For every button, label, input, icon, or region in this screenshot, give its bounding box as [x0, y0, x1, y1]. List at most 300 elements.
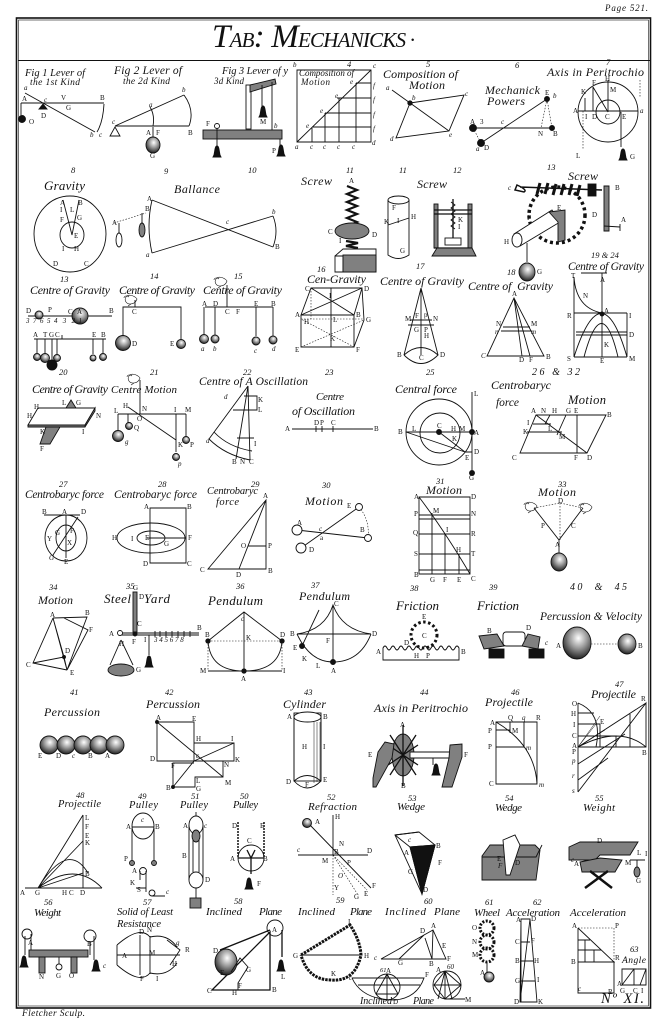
figure 54: wedge in block: 54 — [505, 793, 514, 803]
figure 46: projectile: A — [490, 719, 495, 727]
figure 49: pulley: P — [124, 855, 128, 863]
figure 51: pulley block: A — [183, 822, 188, 830]
figure 9: ballance: 10 — [248, 165, 257, 175]
figure 44: axis in peritrochio machine — [368, 687, 468, 790]
figure 5: composition of motion: Composition of — [383, 67, 460, 81]
figure 15: centre of gravity bar: c — [254, 347, 258, 355]
figure 7: axis in peritrochio: a — [640, 107, 644, 115]
figure 58: inclined plane — [205, 896, 285, 997]
figure 59: inclined plane chain: H — [364, 952, 369, 960]
figure 25: central force: C — [437, 422, 442, 430]
figure 56: weight table with pulleys: B — [87, 940, 92, 948]
figure 20: suspended weights: C — [55, 331, 60, 339]
figure 49: pulley: S — [137, 886, 141, 894]
figure 15: centre of gravity bar: F — [236, 308, 240, 316]
figure 6: mechanick powers — [470, 60, 558, 153]
figure 44: axis in peritrochio machine: F — [464, 751, 468, 759]
figure 22: centre of oscillation sector: C — [249, 458, 254, 466]
figure 37: pendulum cycloid: E — [293, 644, 297, 652]
figure 20b: plank on prism — [27, 382, 109, 453]
title: TAB: MECHANICKS · — [212, 19, 415, 55]
figure 13: centre of gravity line: 13 — [60, 274, 68, 284]
figure 17: centre of gravity cone: G — [414, 326, 419, 334]
figure 43: cylinder: E — [323, 776, 327, 784]
figure 7: axis in peritrochio: K — [581, 88, 586, 96]
figure 21: centre of motion: L — [114, 407, 118, 415]
figure 37: pendulum cycloid: A — [331, 667, 336, 675]
figure 8: gravity: C — [84, 260, 89, 268]
figure 62: acceleration — [505, 897, 560, 1006]
figure 2: lever of the second kind — [110, 65, 193, 160]
figure 38: friction gear and rack — [376, 583, 466, 660]
figure 35: steel yard — [104, 581, 202, 676]
figure 57: solid of least resistance: N — [147, 926, 152, 934]
figure 43: cylinder: I — [323, 743, 326, 751]
figure 11 second: cylinder thread: H — [411, 213, 416, 221]
figure 63: acceleration squares: A — [572, 922, 577, 930]
figure 53: wedge: D — [423, 886, 428, 894]
plate number: Nº XI. — [600, 991, 644, 1007]
figure 58: inclined plane: B — [272, 986, 277, 994]
figure 34: motion parallelograms: A — [50, 611, 55, 619]
figure 14: centre of gravity frame: Centre of Gravity — [119, 283, 196, 297]
figure 20b: plank on prism: I — [82, 428, 85, 436]
figure 12: screw press: 12 — [453, 165, 462, 175]
figure 62: acceleration: B — [515, 957, 520, 965]
figure 42: percussion squares: K — [235, 756, 240, 764]
figure 20b: plank on prism: F — [40, 445, 44, 453]
figure 28: centrobaryc force rectangle: H — [112, 534, 117, 542]
figure 58: inclined plane: C — [207, 987, 212, 995]
figure 1: lever of the first kind: c — [99, 131, 103, 139]
figure 15: centre of gravity bar: B — [271, 300, 276, 308]
figures 26 and 32: centrobaryc force motion: E — [574, 407, 578, 415]
figure 11: screw with block: I — [339, 237, 342, 245]
figure 35: steel yard: F — [132, 638, 136, 646]
figure 55: weight table: D — [597, 837, 602, 845]
figure 60: inclined plane triangle: Inclined — [384, 906, 426, 918]
figure 20: suspended weights: T — [43, 331, 48, 339]
figure 33: motion with hands: D — [558, 497, 563, 505]
figure 35: steel yard: I — [144, 636, 147, 644]
figure 28: centrobaryc force rectangle: Centrobaryc force — [114, 489, 197, 501]
figure 52: refraction: c — [297, 846, 301, 854]
figure 33: motion with hands: P — [541, 522, 545, 530]
figure 7: axis in peritrochio: G — [630, 153, 635, 161]
figures 26 and 32: centrobaryc force motion: K — [523, 428, 528, 436]
figure 39: friction rollers — [476, 582, 549, 658]
figure 18: centre of gravity triangle: Centre of Gravity — [468, 279, 554, 293]
figure 27: centrobaryc force ellipses: F — [70, 527, 74, 535]
figure 56: weight table with pulleys: G — [56, 972, 61, 980]
figure 7: axis in peritrochio: M — [610, 86, 617, 94]
figure 31: motion chart: C — [471, 575, 476, 583]
figure 27: centrobaryc force ellipses — [25, 479, 104, 566]
figure 13: endless screw and gear: G — [537, 268, 542, 276]
figures 61 and 60: inclined plane circles: Inclined — [359, 996, 393, 1007]
figures 40 and 45: percussion and velocity: A — [556, 642, 561, 650]
figure 3: lever of the third kind: 3d Kind — [213, 76, 244, 86]
figure 52: refraction: 52 — [327, 792, 336, 802]
figure 16: centre of gravity cube: F — [356, 346, 360, 354]
figure 4: composition of motion grid: a — [295, 143, 299, 151]
figure 4: composition of motion grid: 4 — [347, 59, 352, 69]
figure 25: central force: D — [474, 448, 479, 456]
figure 49: pulley: K — [130, 879, 135, 887]
figure 46: projectile: Projectile — [484, 695, 534, 709]
figure 46: projectile: m — [539, 781, 544, 789]
figure 55: weight table: Weight — [583, 802, 616, 814]
figure 17: centre of gravity cone: F — [415, 312, 419, 320]
figure 35: steel yard: G — [133, 584, 138, 592]
figure 48: projectile parabolas: Projectile — [57, 799, 101, 810]
figures 26 and 32: centrobaryc force motion: 26 & 32 — [532, 367, 580, 378]
figure 16: centre of gravity cube: I — [329, 292, 332, 300]
figure 63b: angle: C — [633, 987, 638, 995]
figure 11 second: cylinder thread: F — [392, 204, 396, 212]
figure 16: centre of gravity cube: B — [356, 311, 361, 319]
figure 53: wedge: F — [438, 859, 442, 867]
figure 9: ballance — [112, 165, 280, 259]
figure 38: friction gear and rack: Friction — [395, 598, 439, 613]
figure 58: inclined plane: Plane — [258, 906, 282, 918]
figure 6: mechanick powers: a — [476, 145, 480, 153]
figure 54: wedge in block: Wedge — [495, 802, 522, 814]
figures 26 and 32: centrobaryc force motion: I — [527, 419, 530, 427]
figure 1: lever of the first kind: A — [22, 95, 27, 103]
figure 62: acceleration: K — [538, 998, 543, 1006]
figure 18: centre of gravity triangle: A — [512, 290, 517, 298]
figures 19 and 24: centre of gravity parabola — [567, 250, 645, 365]
figure 36: pendulum: c — [241, 615, 245, 623]
figure 4: composition of motion grid: c — [323, 143, 327, 151]
figures 61 and 60: inclined plane circles — [349, 963, 472, 1007]
figure 49: pulley: A — [126, 823, 131, 831]
figure 17: centre of gravity cone: 17 — [416, 261, 425, 271]
figure 52: refraction: B — [334, 848, 339, 856]
figure 16: centre of gravity cube: G — [366, 316, 371, 324]
figure 54: wedge in block: D — [515, 859, 520, 867]
figure 57: solid of least resistance: F — [140, 975, 144, 983]
figure 30: motion of balls: c — [319, 525, 323, 533]
figure 22: centre of oscillation sector: B — [232, 458, 237, 466]
figure 27: centrobaryc force ellipses: G — [49, 554, 54, 562]
figure 57: solid of least resistance — [116, 897, 190, 983]
figure 38: friction gear and rack: A — [376, 648, 381, 656]
figure 31: motion chart: T — [471, 550, 476, 558]
figure 37: pendulum cycloid: L — [316, 662, 320, 670]
figure 25: central force: 25 — [426, 367, 434, 377]
figure 28: centrobaryc force rectangle: D — [143, 560, 148, 568]
figure 8: gravity: D — [53, 260, 58, 268]
figure 60: inclined plane triangle: G — [398, 959, 403, 967]
figure 23: centre of oscillation line: 23 — [325, 367, 334, 377]
figure 17: centre of gravity cone: H — [424, 332, 429, 340]
figure 29: centrobaryc force triangle: Centrobaryc — [207, 486, 258, 497]
figures 26 and 32: centrobaryc force motion: L — [548, 425, 552, 433]
figure 30: motion of balls: E — [347, 502, 351, 510]
figure 4: composition of motion grid: c — [373, 62, 377, 70]
figure 62: acceleration: D — [531, 915, 536, 923]
figure 55: weight table: G — [636, 877, 641, 885]
figures 19 and 24: centre of gravity parabola: N — [583, 292, 588, 300]
figure 28: centrobaryc force rectangle: C — [187, 560, 192, 568]
figure 41: percussion balls: Percussion — [43, 705, 100, 719]
figure 48: projectile parabolas: D — [80, 889, 85, 897]
figure 51: pulley block: D — [205, 876, 210, 884]
figure 37: pendulum cycloid: B — [290, 630, 295, 638]
figure 56: weight table with pulleys: A — [28, 939, 33, 947]
figure 7: axis in peritrochio: L — [576, 152, 580, 160]
figure 15: centre of gravity bar: 15 — [234, 271, 242, 281]
figure 13: endless screw and gear: D — [592, 211, 597, 219]
figure 43: cylinder: D — [286, 778, 291, 786]
figure 61: wheel gears: 61 — [485, 897, 494, 907]
figure 52: refraction: A — [315, 818, 320, 826]
figure 30: motion of balls: A — [297, 519, 302, 527]
figure 22: centre of oscillation sector: 22 — [243, 367, 252, 377]
figure 29: centrobaryc force triangle: 29 — [251, 479, 260, 489]
figure 1: lever of the first kind: O — [29, 118, 34, 126]
figure 21: centre of motion: 21 — [150, 367, 158, 377]
figure 9: ballance: a — [146, 251, 150, 259]
figure 48: projectile parabolas: G — [35, 889, 40, 897]
figure 44: axis in peritrochio machine: Axis in Peritrochio — [373, 701, 468, 715]
figure 16: centre of gravity cube: A — [295, 311, 300, 319]
figure 18: centre of gravity triangle: D — [519, 356, 524, 364]
figure 9: ballance: B — [145, 205, 150, 213]
figure 42: percussion squares: A — [156, 714, 161, 722]
figure 63: acceleration squares: R — [615, 954, 620, 962]
figure 2: lever of the second kind: a — [149, 101, 153, 109]
figure 55: weight table — [569, 793, 648, 888]
figure 31: motion chart: Q — [413, 529, 418, 537]
figure 47: projectile triangles: E — [600, 718, 604, 726]
figure 50: pulley with weight: Pulley — [232, 800, 258, 811]
figure 6: mechanick powers: A — [470, 118, 475, 126]
figure 20: suspended weights — [33, 331, 106, 377]
figure 12: screw press — [417, 165, 476, 256]
figure 42: percussion squares: F — [171, 762, 175, 770]
figure 20b: plank on prism: L — [62, 399, 66, 407]
figure 58: inclined plane: Inclined — [205, 906, 242, 918]
figure 36: pendulum: 36 — [235, 581, 245, 591]
figure 16: centre of gravity cube: L — [333, 316, 337, 324]
figure 47: projectile triangles: C — [572, 732, 577, 740]
figure 31: motion chart: Motion — [425, 483, 462, 497]
figures 40 and 45: percussion and velocity: Percussion & Velocity — [539, 611, 643, 623]
figure 52: refraction: N — [339, 840, 344, 848]
figures 26 and 32: centrobaryc force motion: A — [531, 407, 536, 415]
figure 62: acceleration: I — [537, 976, 540, 984]
figure 42: percussion squares: M — [225, 779, 232, 787]
figure 4: composition of motion grid: e — [320, 107, 323, 115]
figure 11 second: cylinder thread: G — [400, 247, 405, 255]
figure 31: motion chart: I — [446, 526, 449, 534]
figure 8: gravity: B — [78, 199, 83, 207]
figure 8: gravity: I — [60, 206, 63, 214]
figure 2: lever of the second kind: F — [156, 129, 160, 137]
figures 19 and 24: centre of gravity parabola: D — [629, 331, 634, 339]
figure 52: refraction: E — [364, 890, 368, 898]
figure 20: suspended weights: G — [49, 331, 54, 339]
figure 9: ballance: 9 — [164, 166, 169, 176]
figure 2: lever of the second kind: b — [182, 86, 186, 94]
figure 29: centrobaryc force triangle: A — [263, 492, 268, 500]
figure 57: solid of least resistance: Solid of Least — [117, 907, 174, 918]
figure 57: solid of least resistance: M — [149, 949, 156, 957]
figure 57: solid of least resistance: D — [139, 928, 144, 936]
figure 63b: angle: I — [641, 987, 644, 995]
figure 41: percussion balls: c — [72, 752, 76, 760]
figure 36: pendulum: I — [283, 667, 286, 675]
figures 19 and 24: centre of gravity parabola: I — [629, 312, 632, 320]
figures 26 and 32: centrobaryc force motion: C — [512, 454, 517, 462]
figure 16: centre of gravity cube: H — [304, 318, 309, 326]
figure 13: endless screw and gear: F — [527, 214, 531, 222]
figure 14: centre of gravity frame: D — [132, 340, 137, 348]
figure 60: inclined plane triangle: Plane — [433, 906, 460, 918]
figure 23: centre of oscillation line: C — [331, 419, 336, 427]
figure 7: axis in peritrochio: C — [605, 113, 610, 121]
figure 52: refraction: P — [347, 859, 351, 867]
figure 1: lever of the first kind: Fig 1 Lever of — [24, 68, 87, 79]
figure 47: projectile triangles: I — [573, 721, 576, 729]
figures 40 and 45: percussion and velocity: B — [638, 642, 643, 650]
figure 53: wedge — [395, 793, 442, 894]
engraver signature: Fletcher Sculp. — [21, 1009, 85, 1019]
figure 48: projectile parabolas — [20, 790, 102, 897]
figure 58: inclined plane: H — [232, 989, 237, 997]
figure 34: motion parallelograms: E — [70, 669, 74, 677]
figure 57: solid of least resistance: I — [156, 975, 159, 983]
figure 4: composition of motion grid: d — [372, 139, 376, 147]
figures 61 and 60: inclined plane circles: A — [386, 967, 391, 975]
figure 15: centre of gravity bar: b — [213, 345, 217, 353]
figure 60: inclined plane triangle: c — [374, 954, 378, 962]
figure 53: wedge: B — [436, 842, 441, 850]
figure 61: wheel gears: O — [472, 924, 477, 932]
figure 18: centre of gravity triangle: n — [495, 328, 499, 336]
figure 8: gravity: Gravity — [44, 178, 85, 193]
figure 61: wheel gears: M — [472, 951, 479, 959]
figure 13: endless screw and gear: A — [621, 216, 626, 224]
figure 35: steel yard: H — [119, 640, 124, 648]
figure 47: projectile triangles: O — [572, 700, 577, 708]
figure 42: percussion squares: N — [224, 761, 229, 769]
figure 31: motion chart: P — [414, 510, 418, 518]
figure 35: steel yard: C — [137, 620, 142, 628]
figure 30: motion of balls: 30 — [321, 480, 331, 490]
figure 49: pulley: 49 — [138, 791, 147, 801]
figures 61 and 60: inclined plane circles: M — [465, 996, 472, 1004]
figure 13: endless screw and gear — [504, 162, 626, 281]
figure 4: composition of motion grid: Motion — [300, 77, 330, 87]
figure 38: friction gear and rack: H — [414, 652, 419, 660]
figure 46: projectile: Q — [508, 714, 513, 722]
figure 17: centre of gravity cone: p — [424, 311, 428, 319]
figure 41: percussion balls: A — [105, 752, 110, 760]
figure 54: wedge in block: F — [497, 862, 503, 870]
figure 48: projectile parabolas: H — [62, 889, 67, 897]
figure 13: endless screw and gear: E — [557, 204, 561, 212]
figure 61: wheel gears — [472, 897, 500, 982]
figure 23: centre of oscillation line: Centre — [316, 391, 344, 403]
figures 26 and 32: centrobaryc force motion: M — [559, 433, 566, 441]
figure 1: lever of the first kind: the 1st Kind — [30, 78, 80, 88]
figures 19 and 24: centre of gravity parabola: 19 & 24 — [591, 250, 620, 260]
figure 52: refraction — [297, 792, 376, 901]
figure 6: mechanick powers: b — [553, 92, 557, 100]
figure 28: centrobaryc force rectangle: F — [188, 534, 192, 542]
figure 5: composition of motion: b — [412, 94, 416, 102]
figure 50: pulley with weight: D — [232, 822, 237, 830]
figure 15: centre of gravity bar: A — [202, 300, 207, 308]
figure 13: centre of gravity line: A — [77, 308, 82, 316]
figure 38: friction gear and rack: E — [422, 613, 426, 621]
figure 51: pulley block: c — [204, 822, 208, 830]
figure 48: projectile parabolas: 48 — [76, 790, 85, 800]
figure 25: central force: A — [474, 429, 479, 437]
figure 4: composition of motion grid — [293, 59, 377, 151]
figure 18: centre of gravity triangle: M — [531, 320, 538, 328]
figure 61: wheel gears: A — [480, 969, 485, 977]
figure 13: endless screw and gear: Screw — [568, 169, 598, 183]
figure 1: lever of the first kind: a — [24, 84, 28, 92]
figures 26 and 32: centrobaryc force motion — [491, 367, 612, 462]
figure 62: acceleration: H — [534, 957, 539, 965]
figure 48: projectile parabolas: K — [85, 839, 90, 847]
figure 35: steel yard: B — [197, 624, 202, 632]
figure 62: acceleration: C — [515, 938, 520, 946]
figure 9: ballance: b — [272, 208, 276, 216]
figure 7: axis in peritrochio: A — [573, 107, 578, 115]
figure 47: projectile triangles: s — [572, 787, 575, 795]
figures 61 and 60: inclined plane circles: c — [349, 974, 353, 982]
figure 36: pendulum: M — [200, 667, 207, 675]
figure 53: wedge: Wedge — [397, 801, 425, 813]
figure 38: friction gear and rack: C — [422, 632, 427, 640]
figure 57: solid of least resistance: A — [122, 952, 127, 960]
figure 48: projectile parabolas: F — [85, 823, 89, 831]
figure 9: ballance: c — [226, 218, 230, 226]
figure 1: lever of the first kind: G — [66, 104, 71, 112]
figure 58: inclined plane: D — [213, 947, 218, 955]
figure 63b: angle: Angle — [621, 956, 646, 966]
figure 14: centre of gravity frame — [116, 271, 196, 350]
figure 1: lever of the first kind: b — [90, 131, 94, 139]
figure 6: mechanick powers: Mechanick — [484, 83, 541, 97]
figure 31: motion chart: H — [456, 546, 461, 554]
figures 26 and 32: centrobaryc force motion: Motion — [567, 393, 606, 407]
figures 61 and 60: inclined plane circles: 61 — [380, 967, 386, 974]
figure 31: motion chart: G — [469, 474, 474, 482]
figure 35: steel yard: A — [109, 630, 114, 638]
figure 28: centrobaryc force rectangle: A — [144, 503, 149, 511]
figure 21: centre of motion: p — [177, 460, 182, 468]
figure 41: percussion balls — [38, 687, 124, 760]
figure 6: mechanick powers: Powers — [486, 94, 525, 108]
figure 22: centre of oscillation sector: I — [254, 440, 257, 448]
figure 16: centre of gravity cube: C — [305, 285, 310, 293]
figures 61 and 60: inclined plane circles: Plane — [412, 996, 435, 1007]
figure 13: centre of gravity line: Centre of Gravity — [30, 283, 111, 297]
figure 13: centre of gravity line: P — [48, 306, 52, 314]
figure 54: wedge in block: E — [497, 855, 501, 863]
figure 51: pulley block: 51 — [191, 791, 200, 801]
figure 4: composition of motion grid: e — [350, 78, 353, 86]
figure 15: centre of gravity bar: d — [272, 345, 276, 353]
